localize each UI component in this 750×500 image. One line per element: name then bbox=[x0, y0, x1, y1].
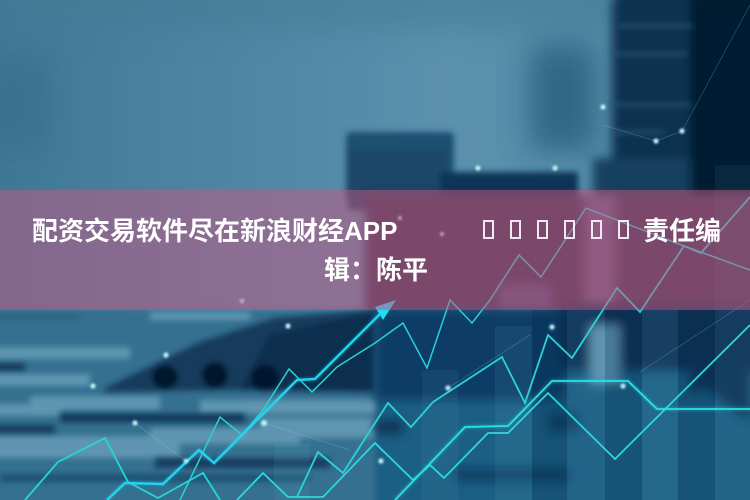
glowing dots bbox=[90, 104, 685, 464]
big dark coin bbox=[105, 310, 375, 392]
right lower dark shapes bbox=[375, 305, 750, 482]
dark coin gaps bbox=[0, 314, 330, 482]
light coin edges bbox=[0, 312, 375, 458]
dark area behind caption band right side bbox=[365, 195, 750, 315]
right coin stack bbox=[593, 0, 750, 208]
middle coin piles bbox=[346, 132, 578, 212]
chart line glow bbox=[107, 312, 750, 500]
chart lines bbox=[25, 197, 750, 500]
caption line 2: 辑：陈平 bbox=[324, 255, 428, 285]
top soft shadows bbox=[0, 0, 750, 150]
thin connector lines bbox=[135, 5, 750, 461]
caption line 1 right: 责任编 bbox=[643, 216, 721, 246]
lower blurred coin layers bbox=[0, 310, 750, 500]
arrow head bbox=[375, 300, 396, 320]
missing-glyph boxes bbox=[483, 220, 629, 239]
caption line 1 left: 配资交易软件尽在新浪财经APP bbox=[32, 216, 397, 246]
chart bars bbox=[274, 165, 750, 500]
pink caption band bbox=[0, 190, 750, 310]
coin stack ribs bbox=[612, 24, 693, 134]
